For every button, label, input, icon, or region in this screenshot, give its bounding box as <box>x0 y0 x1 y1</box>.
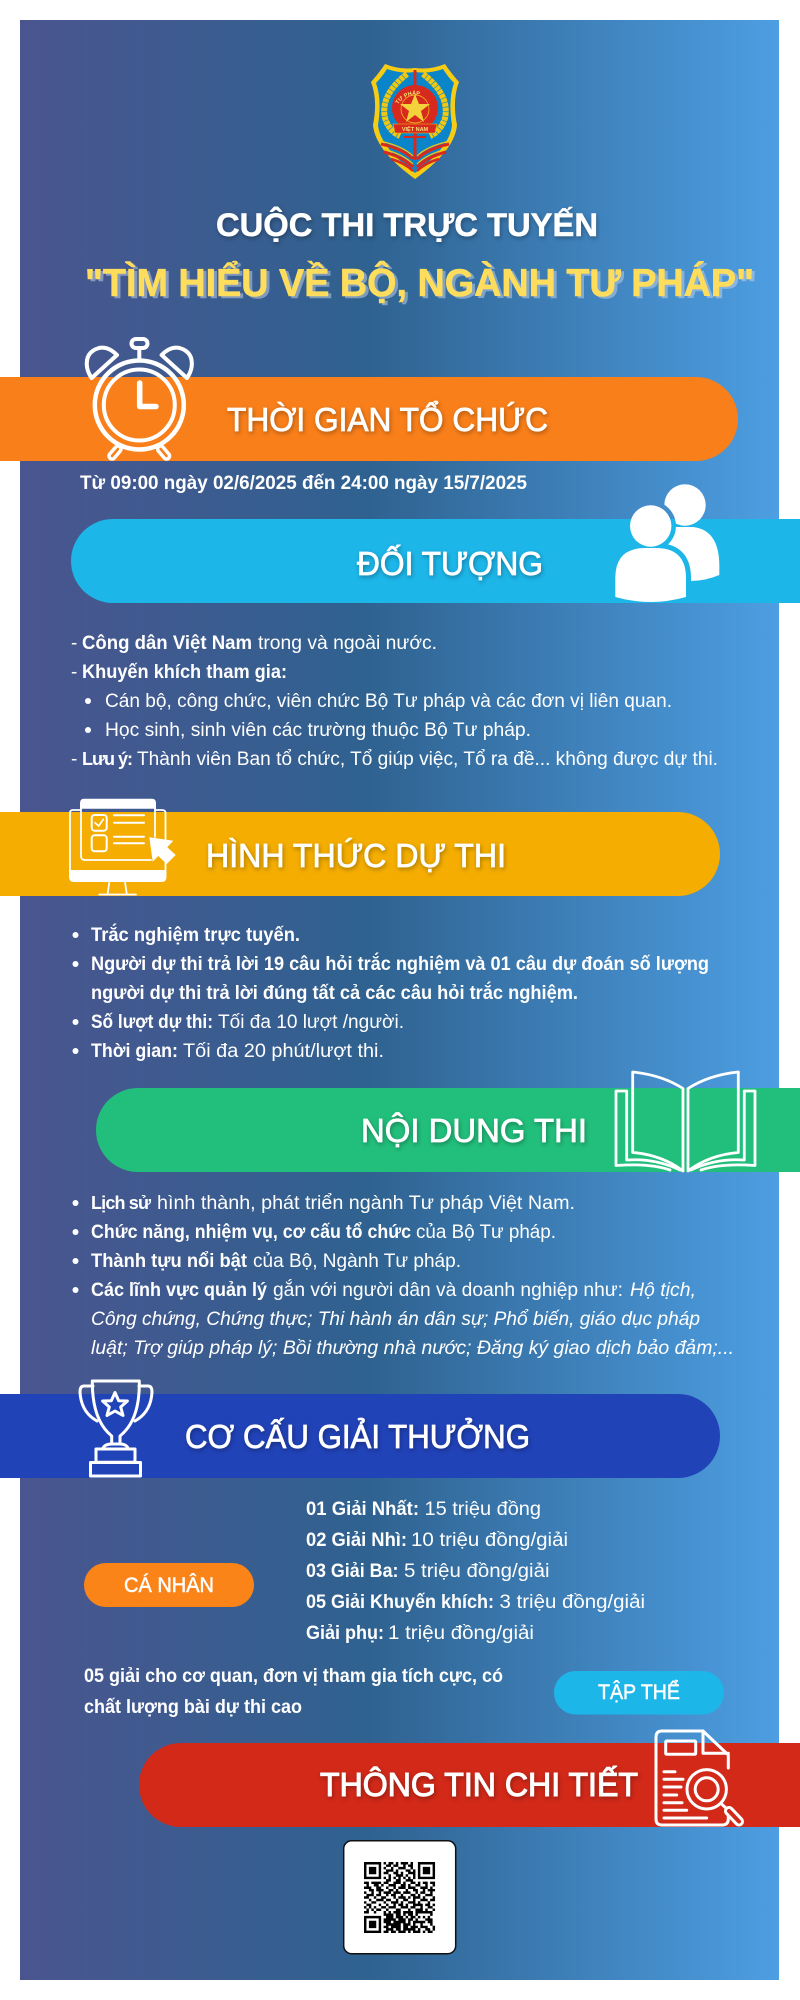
audience text: Cán bộ, công chức, viên chức Bộ Tư pháp và các đơn vị liên quan. <box>105 691 672 712</box>
audience text: Học sinh, sinh viên các trường thuộc Bộ Tư pháp. <box>105 720 531 741</box>
heading: NỘI DUNG THI <box>361 1112 587 1150</box>
audience text: Thành viên Ban tổ chức, Tổ giúp việc, Tổ ra đề... không được dự thi. <box>137 749 718 770</box>
green banner <box>96 1088 800 1172</box>
prize list: 15 triệu đồng <box>424 1499 541 1520</box>
prize list: 01 Giải Nhất: <box>306 1499 419 1520</box>
audience text <box>71 633 718 770</box>
icon: document with magnifier <box>656 1731 739 1825</box>
QR code card <box>344 1841 456 1954</box>
panel: thông tin chi tiết <box>139 1731 800 1954</box>
emblem text: VIỆT NAM <box>402 125 429 133</box>
content list: hình thành, phát triển ngành Tư pháp Việt Nam. <box>157 1193 575 1214</box>
cyan banner <box>71 519 800 603</box>
panel: thời gian tổ chức <box>0 339 738 494</box>
audience text: Công dân Việt Nam <box>82 633 252 654</box>
content list: gắn với người dân và doanh nghiệp như: <box>273 1279 623 1301</box>
panel: nội dung thi <box>72 1072 800 1359</box>
emblem top text: TƯ PHÁP <box>395 90 420 104</box>
collective prize text: chất lượng bài dự thi cao <box>84 1697 302 1718</box>
panel: đối tượng <box>71 484 800 770</box>
content list: Thành tựu nổi bật <box>91 1251 248 1272</box>
prize list: 3 triệu đồng/giải <box>500 1592 645 1613</box>
content list: Chức năng, nhiệm vụ, cơ cấu tổ chức <box>91 1222 411 1243</box>
content list: Lịch sử <box>91 1193 152 1213</box>
blue banner <box>0 1394 720 1478</box>
icon: trophy <box>80 1381 152 1476</box>
prize list: 03 Giải Ba: <box>306 1561 398 1582</box>
format list: Trắc nghiệm trực tuyến. <box>91 924 300 946</box>
content list: của Bộ Tư pháp. <box>416 1222 556 1243</box>
audience text: trong và ngoài nước. <box>258 633 437 654</box>
icon: people <box>615 484 719 602</box>
audience text: - <box>71 662 77 683</box>
icon: online test monitor <box>69 799 176 894</box>
red banner <box>139 1743 800 1827</box>
individual prizes <box>84 1499 645 1644</box>
QR code <box>364 1863 435 1932</box>
prize list: 10 triệu đồng/giải <box>411 1530 568 1551</box>
title <box>85 207 754 305</box>
prize list <box>306 1499 645 1644</box>
audience text: Khuyến khích tham gia: <box>82 662 287 683</box>
panel: hình thức dự thi <box>0 799 720 1062</box>
collective prize text <box>84 1666 503 1718</box>
pill: cá nhân: CÁ NHÂN <box>124 1574 214 1597</box>
orange banner <box>0 377 738 461</box>
heading: THÔNG TIN CHI TIẾT <box>320 1766 638 1804</box>
heading: ĐỐI TƯỢNG <box>357 544 543 583</box>
format list: Tối đa 10 lượt /người. <box>218 1012 404 1033</box>
content list: Các lĩnh vực quản lý <box>91 1280 267 1301</box>
collective prize <box>84 1666 724 1718</box>
pill: cá nhân <box>84 1563 254 1607</box>
panel: cơ cấu giải thưởng <box>0 1381 724 1718</box>
audience text: - <box>71 749 77 770</box>
pill: tập thể: TẬP THỂ <box>598 1681 680 1704</box>
audience text: Lưu ý: <box>82 749 133 769</box>
format list <box>72 924 709 1062</box>
title line 1: CUỘC THI TRỰC TUYẾN <box>216 207 598 243</box>
heading: CƠ CẤU GIẢI THƯỞNG <box>185 1418 530 1456</box>
logo emblem <box>371 64 459 179</box>
title line 2: "TÌM HIỂU VỀ BỘ, NGÀNH TƯ PHÁP" <box>85 260 754 305</box>
prize list: 05 Giải Khuyến khích: <box>306 1592 494 1613</box>
date text: Từ 09:00 ngày 02/6/2025 đến 24:00 ngày 15/7/2025 <box>80 473 527 494</box>
prize list: 5 triệu đồng/giải <box>404 1561 550 1582</box>
yellow banner <box>0 812 720 896</box>
heading: THỜI GIAN TỔ CHỨC <box>227 401 548 439</box>
prize list: 02 Giải Nhì: <box>306 1530 407 1551</box>
audience text: - <box>71 633 77 654</box>
content list: luật; Trợ giúp pháp lý; Bồi thường nhà nước; Đăng ký giao dịch bảo đảm;... <box>91 1338 734 1359</box>
format list: Người dự thi trả lời 19 câu hỏi trắc nghiệm và 01 câu dự đoán số lượng <box>91 953 709 975</box>
prize list: Giải phụ: <box>306 1623 384 1644</box>
icon: alarm clock <box>87 339 192 456</box>
format list: Tối đa 20 phút/lượt thi. <box>183 1041 384 1062</box>
content list: Công chứng, Chứng thực; Thi hành án dân sự; Phổ biến, giáo dục pháp <box>91 1309 700 1330</box>
collective prize text: 05 giải cho cơ quan, đơn vị tham gia tích cực, có <box>84 1666 503 1687</box>
content list: Hộ tịch, <box>630 1280 696 1301</box>
heading: HÌNH THỨC DỰ THI <box>206 837 506 875</box>
format list: Thời gian: <box>91 1041 178 1062</box>
format list: người dự thi trả lời đúng tất cả các câu hỏi trắc nghiệm. <box>91 982 578 1004</box>
content list <box>72 1193 734 1359</box>
format list: Số lượt dự thi: <box>91 1012 213 1033</box>
pill: tập thể <box>554 1671 724 1714</box>
prize list: 1 triệu đồng/giải <box>388 1623 534 1644</box>
content list: của Bộ, Ngành Tư pháp. <box>253 1251 461 1272</box>
icon: open book <box>616 1072 755 1171</box>
